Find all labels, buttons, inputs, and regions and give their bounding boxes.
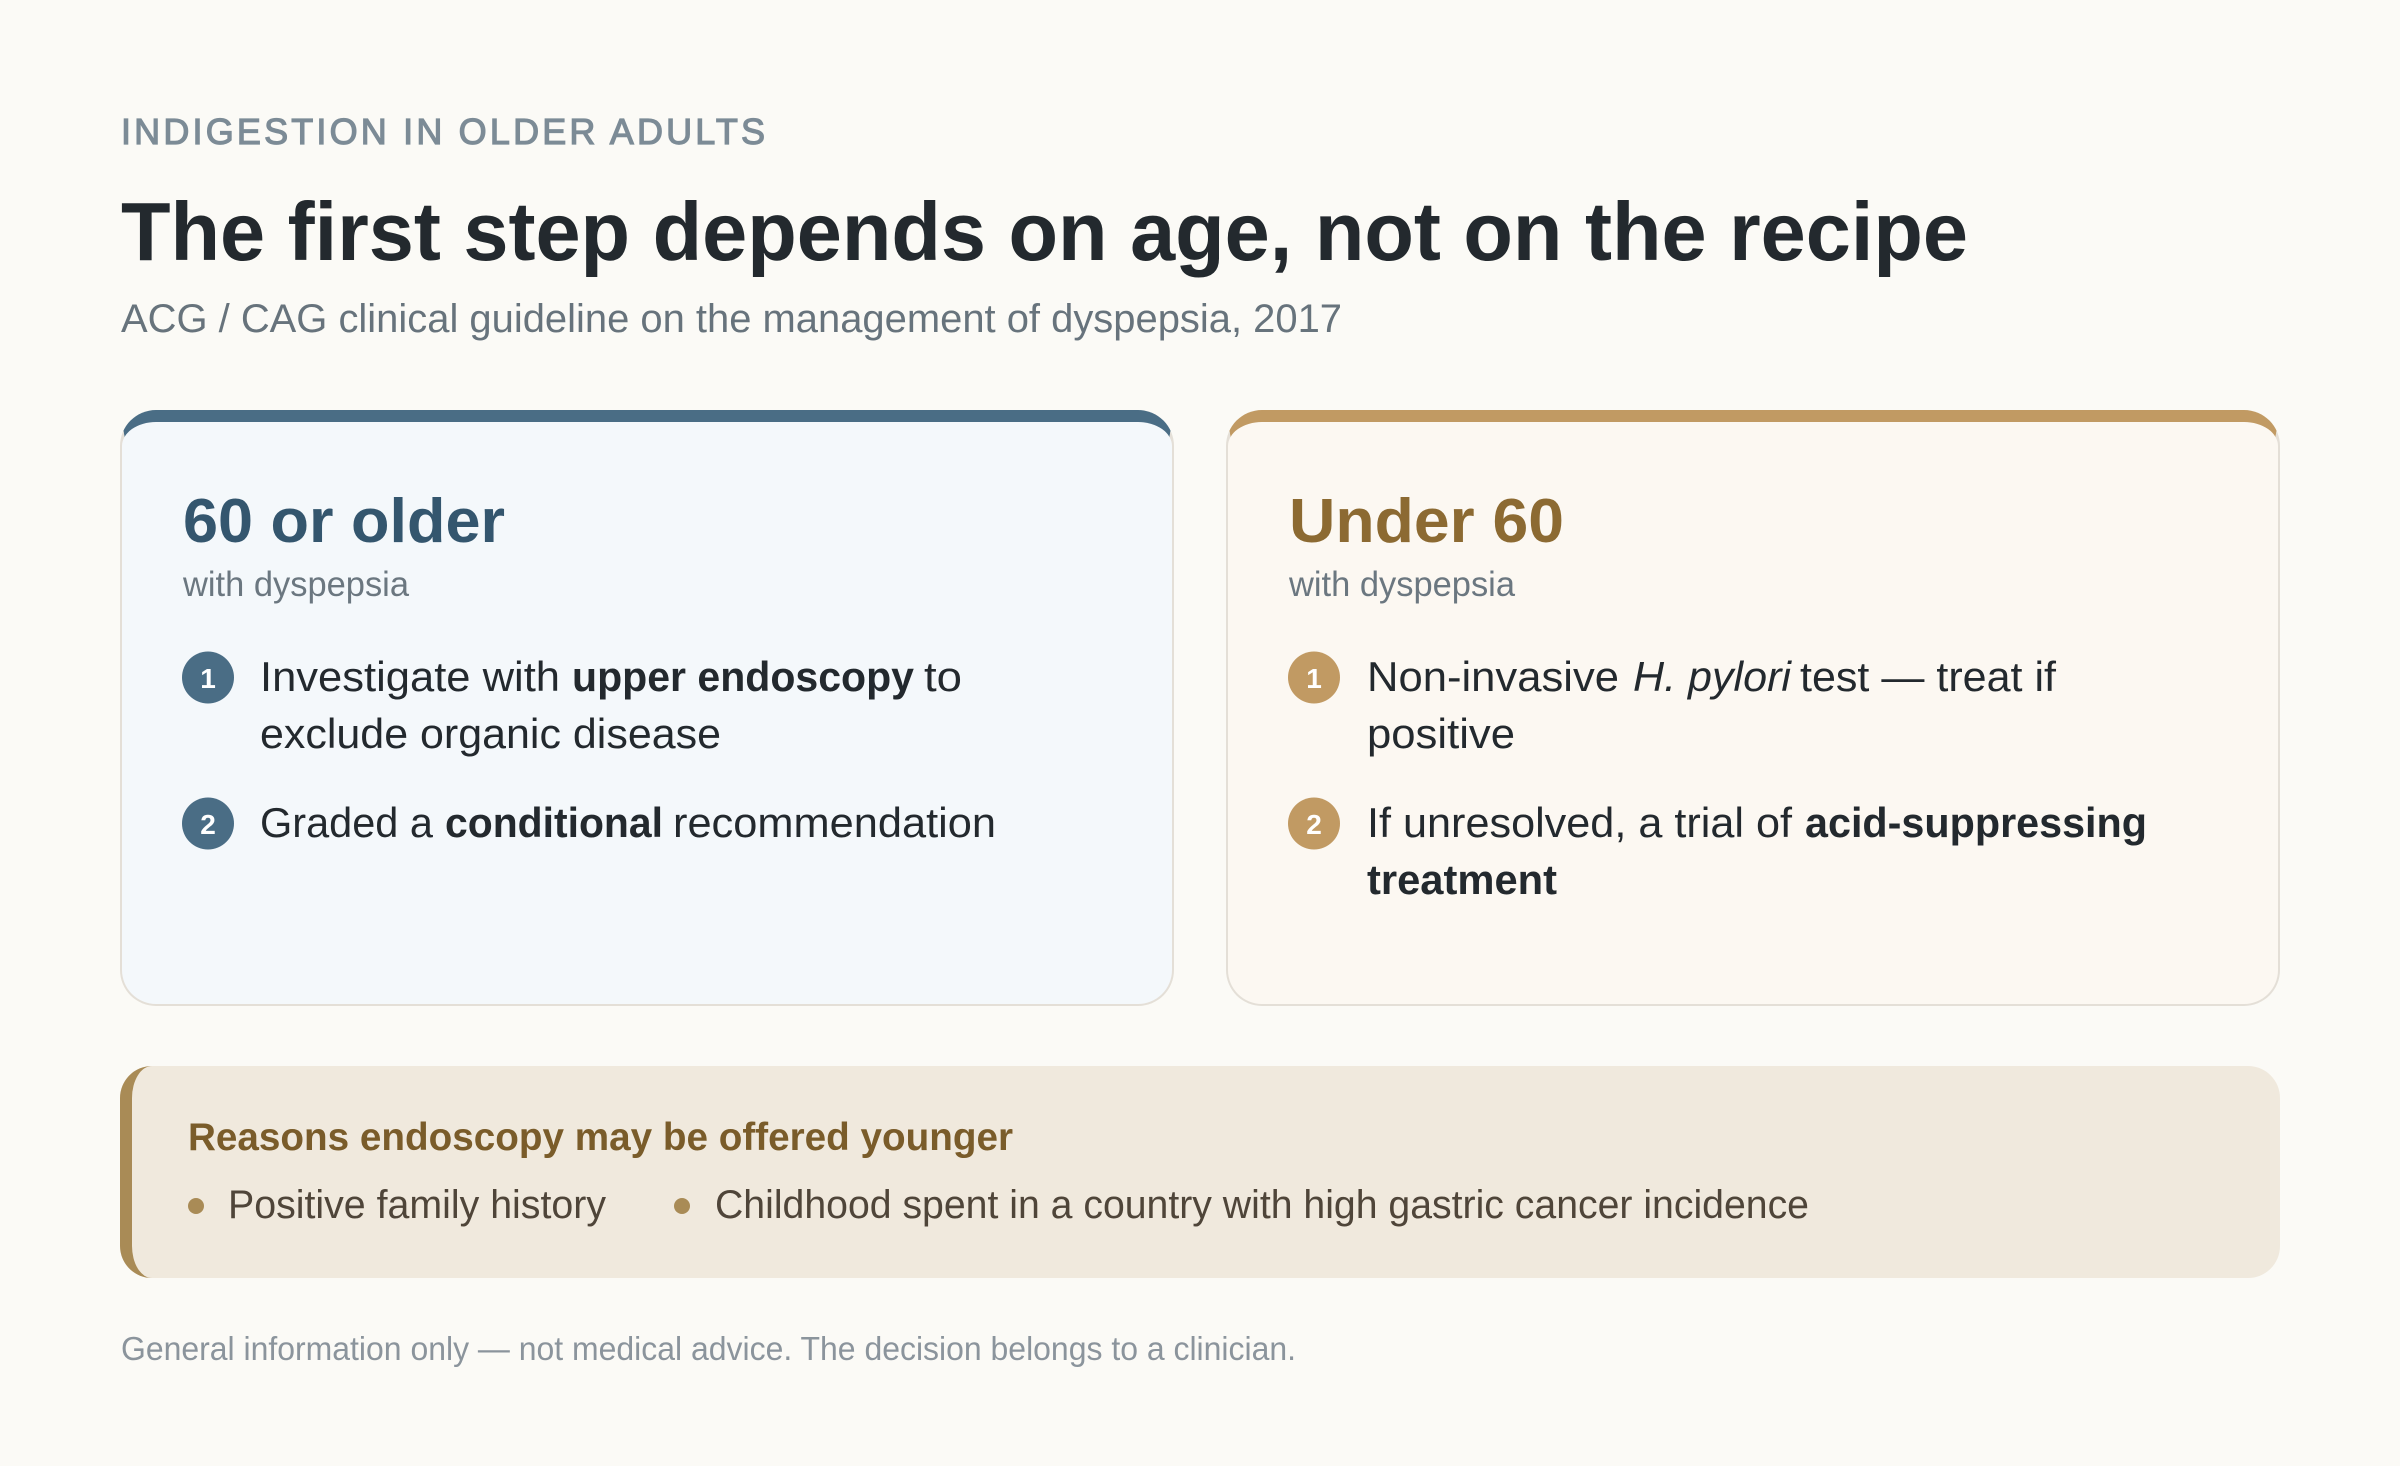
step 2: If unresolved, a trial of: [1367, 799, 1792, 846]
step 2: 2: [1306, 809, 1322, 840]
bullet: childhood country: Childhood spent in a country with high gastric cancer incidence: [715, 1183, 1809, 1227]
step 1: Non-invasive: [1367, 653, 1619, 700]
heading: under 60: Under 60: [1289, 487, 1564, 556]
step 1: [182, 652, 962, 757]
subheading: with dyspepsia: [1288, 565, 1516, 604]
step 1: [1288, 652, 2056, 757]
step 1: upper endoscopy: [572, 653, 914, 700]
step 1: H. pylori: [1633, 653, 1793, 700]
title: The first step depends on age, not on the recipe: [121, 185, 1968, 278]
heading: 60 or older: 60 or older: [183, 487, 505, 556]
step 1: 1: [200, 663, 216, 694]
footer disclaimer: General information only — not medical advice. The decision belongs to a clinician.: [121, 1330, 1296, 1367]
subheading: with dyspepsia: [182, 565, 410, 604]
step 1: positive: [1367, 710, 1515, 757]
step 2: recommendation: [673, 799, 996, 846]
step 2: [1288, 798, 2147, 903]
callout: reasons for earlier endoscopy: [120, 1066, 2280, 1278]
step 1: Investigate with: [260, 653, 560, 700]
step 2: 2: [200, 809, 216, 840]
step 2: treatment: [1367, 856, 1557, 903]
step 1: exclude organic disease: [260, 710, 721, 757]
panel: under 60: [1226, 410, 2280, 1006]
subtitle: ACG / CAG clinical guideline on the management of dyspepsia, 2017: [121, 297, 1342, 341]
step 1: 1: [1306, 663, 1322, 694]
step 2: acid-suppressing: [1805, 799, 2147, 846]
callout heading: Reasons endoscopy may be offered younger: [188, 1116, 1013, 1159]
step 1: test — treat if: [1800, 653, 2056, 700]
step 2: [182, 798, 996, 850]
bullet: family history: Positive family history: [228, 1183, 606, 1227]
step 2: conditional: [445, 799, 663, 846]
eyebrow: INDIGESTION IN OLDER ADULTS: [121, 111, 765, 152]
step 1: to: [924, 653, 962, 700]
panel: 60 or older: [120, 410, 1174, 1006]
step 2: Graded a: [260, 799, 434, 846]
